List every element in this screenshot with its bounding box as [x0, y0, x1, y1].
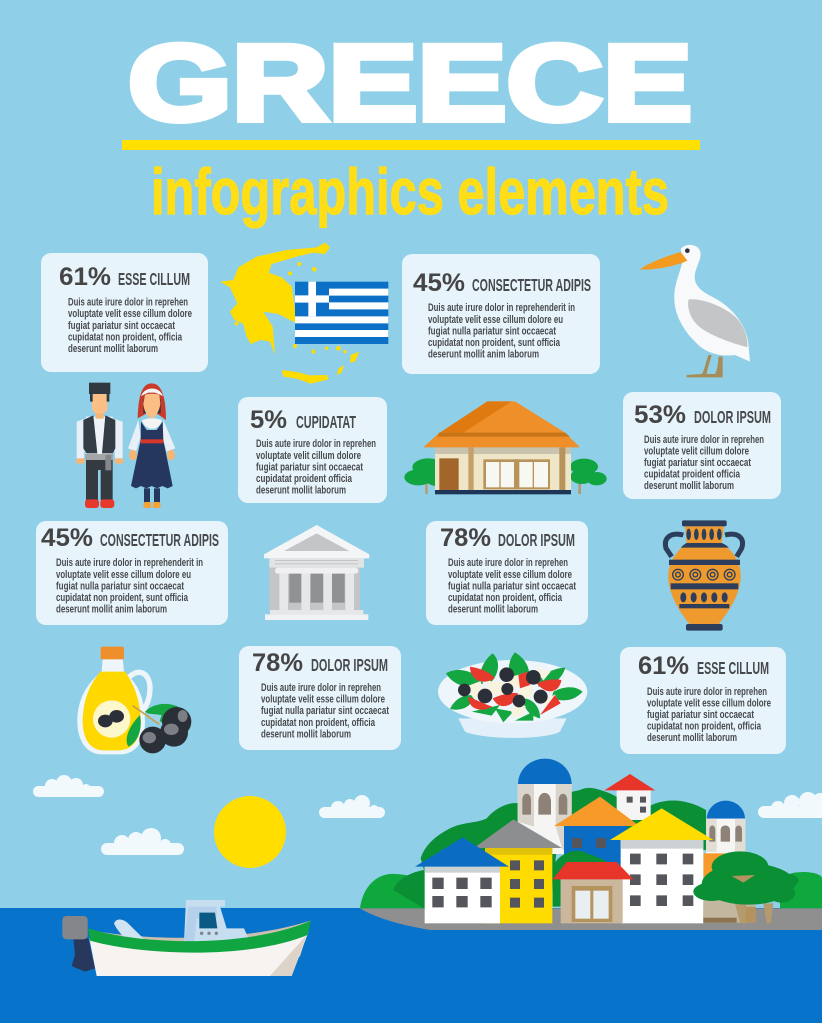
icon: sun [214, 796, 286, 868]
panel: 61% esse cillum: 61% [59, 263, 111, 291]
panel: 5% cupidatat: 5% [250, 406, 287, 434]
icon: map of Greece [220, 243, 359, 384]
panel: 5% cupidatat: fugiat pariatur sint occaecat [256, 462, 363, 474]
panel: 53% dolor ipsum: voluptate velit cillum dolore [644, 446, 749, 458]
panel: 61% esse cillum lower: fugiat pariatur sint occaecat [647, 709, 754, 721]
panel: 78% dolor ipsum middle: cupidatat non proident, officia [448, 592, 563, 604]
panel: 78% dolor ipsum middle: DOLOR IPSUM [498, 530, 575, 550]
panel: 61% esse cillum: cupidatat non proident, officia [68, 332, 183, 344]
panel: 78% dolor ipsum middle: fugiat nulla pariatur sint occaecat [448, 580, 576, 592]
orange-roof blue house [554, 797, 639, 869]
panel: 45% consectetur adipis middle: cupidatat non proident, sunt officia [56, 592, 189, 604]
title: GREECE [128, 22, 692, 143]
tree and cottage [693, 851, 798, 923]
panel: 45% consectetur adipis top [402, 254, 600, 374]
panel: 78% dolor ipsum lower: Duis aute irure dolor in reprehen [261, 682, 381, 694]
white house with blue roof [415, 837, 509, 923]
panel: 78% dolor ipsum lower: voluptate velit esse cillum dolore [261, 694, 385, 706]
panel: 5% cupidatat: deserunt mollit laborum [256, 484, 346, 496]
small red-roof house [604, 774, 655, 820]
panel: 53% dolor ipsum [623, 392, 781, 499]
panel: 45% consectetur adipis top: Duis aute irure dolor in reprehenderit in [428, 302, 575, 314]
panel: 78% dolor ipsum middle: Duis aute irure dolor in reprehen [448, 557, 568, 569]
panel: 78% dolor ipsum lower [239, 646, 401, 750]
clouds [33, 775, 822, 855]
red-roof shop [553, 862, 633, 923]
icon: Greek salad [438, 652, 587, 738]
small domed tower [703, 801, 745, 878]
panel: 61% esse cillum lower: deserunt mollit laborum [647, 732, 737, 744]
panel: 78% dolor ipsum middle: 78% [440, 524, 491, 552]
panel: 45% consectetur adipis middle: voluptate velit esse cillum dolore eu [56, 569, 191, 581]
panel: 78% dolor ipsum lower: 78% [252, 649, 303, 677]
icon: pelican [640, 245, 750, 377]
panel: 78% dolor ipsum middle: deserunt mollit laborum [448, 604, 538, 616]
illustration: boat [62, 900, 311, 976]
panel: 61% esse cillum: voluptate velit esse cillum dolore [68, 308, 192, 320]
illustration: seaside town [360, 759, 822, 930]
panel: 53% dolor ipsum: 53% [634, 401, 686, 429]
panel: 78% dolor ipsum lower: cupidatat non proident, officia [261, 717, 376, 729]
title underline [122, 140, 700, 150]
panel: 45% consectetur adipis middle: Duis aute irure dolor in reprehenderit in [56, 557, 203, 569]
panel: 61% esse cillum: deserunt mollit laborum [68, 343, 158, 355]
panel: 61% esse cillum: fugiat pariatur sint occaecat [68, 320, 175, 332]
panel: 61% esse cillum lower: cupidatat non proident, officia [647, 720, 762, 732]
panel: 61% esse cillum lower: 61% [638, 652, 689, 680]
panel: 61% esse cillum lower: ESSE CILLUM [697, 658, 769, 678]
panel: 61% esse cillum lower: Duis aute irure dolor in reprehen [647, 686, 767, 698]
panel: 78% dolor ipsum middle: voluptate velit esse cillum dolore [448, 569, 572, 581]
panel: 53% dolor ipsum: deserunt mollit laborum [644, 480, 734, 492]
subtitle: infographics elements [151, 155, 669, 228]
panel: 61% esse cillum lower: voluptate velit esse cillum dolore [647, 698, 771, 710]
panel: 45% consectetur adipis middle: CONSECTETUR ADIPIS [100, 530, 219, 550]
panel: 5% cupidatat: cupidatat proident officia [256, 473, 353, 485]
panel: 78% dolor ipsum lower: deserunt mollit laborum [261, 728, 351, 740]
icon: Greek temple [264, 525, 369, 620]
panel: 53% dolor ipsum: fugiat pariatur sint occaecat [644, 457, 751, 469]
panel: 78% dolor ipsum lower: fugiat nulla pariatur sint occaecat [261, 705, 389, 717]
panel: 45% consectetur adipis top: 45% [413, 269, 465, 297]
outboard motor [72, 938, 95, 972]
big domed tower [518, 759, 572, 854]
panel: 61% esse cillum: ESSE CILLUM [118, 269, 190, 289]
panel: 5% cupidatat [238, 397, 387, 503]
panel: 5% cupidatat: Duis aute irure dolor in reprehen [256, 438, 376, 450]
icon: house with trees [404, 401, 607, 494]
panel: 5% cupidatat: CUPIDATAT [296, 412, 356, 432]
icon: couple in traditional costume [76, 383, 175, 508]
icon: Greek flag [295, 282, 388, 344]
icon: amphora vase [665, 520, 743, 631]
quay [360, 908, 822, 930]
yellow house [474, 819, 562, 923]
panel: 61% esse cillum lower [620, 647, 786, 754]
panel: 53% dolor ipsum: Duis aute irure dolor in reprehen [644, 434, 764, 446]
panel: 78% dolor ipsum middle [426, 521, 588, 625]
green bush [553, 851, 610, 907]
panel: 45% consectetur adipis middle [36, 521, 228, 625]
panel: 53% dolor ipsum: cupidatat proident officia [644, 468, 741, 480]
cabin [184, 900, 250, 942]
yellow-roof white house [610, 808, 713, 923]
panel: 45% consectetur adipis middle: 45% [41, 524, 93, 552]
icon: olive oil bottle and olives [77, 647, 191, 754]
panel: 53% dolor ipsum: DOLOR IPSUM [694, 407, 771, 427]
panel: 61% esse cillum: Duis aute irure dolor in reprehen [68, 296, 188, 308]
left and right hills [360, 872, 822, 908]
sea [0, 908, 822, 1023]
panel: 45% consectetur adipis middle: deserunt mollit anim laborum [56, 604, 167, 616]
panel: 45% consectetur adipis top: CONSECTETUR ADIPIS [472, 275, 591, 295]
panel: 78% dolor ipsum lower: DOLOR IPSUM [311, 655, 388, 675]
panel: 45% consectetur adipis middle: fugiat nulla pariatur sint occaecat [56, 580, 184, 592]
hull [89, 932, 309, 976]
panel: 45% consectetur adipis top: cupidatat non proident, sunt officia [428, 337, 561, 349]
panel: 45% consectetur adipis top: voluptate velit esse cillum dolore eu [428, 314, 563, 326]
panel: 61% esse cillum [41, 253, 208, 372]
panel: 5% cupidatat: voluptate velit cillum dolore [256, 450, 361, 462]
dark green hillside [393, 788, 706, 910]
panel: 45% consectetur adipis top: fugiat nulla pariatur sint occaecat [428, 326, 556, 338]
panel: 45% consectetur adipis top: deserunt mollit anim laborum [428, 348, 539, 360]
